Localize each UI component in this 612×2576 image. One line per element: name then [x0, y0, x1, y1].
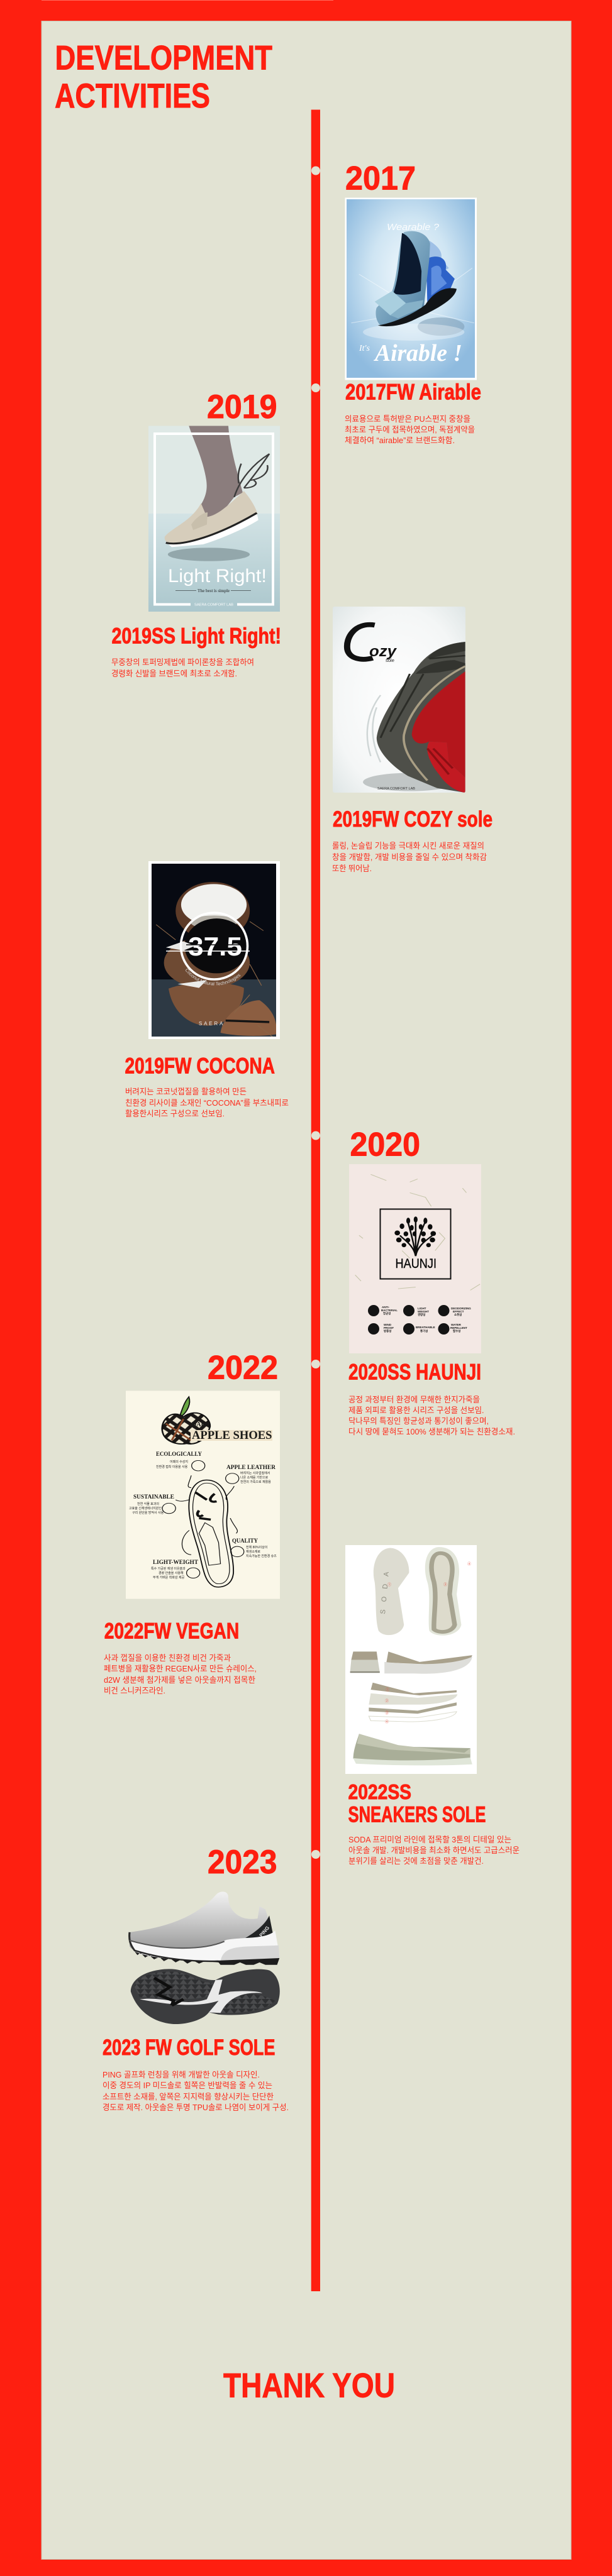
logo circle [181, 913, 248, 979]
outsole spikes [135, 1951, 279, 1965]
description: COCONA: 버려지는 코코넛껍질을 활용하여 만든 [125, 1087, 247, 1096]
insole illustration [162, 1460, 244, 1587]
feature icons: 방풍성 [384, 1329, 391, 1333]
description: COCONA [125, 1087, 289, 1118]
heading: 2019FW COZY sole: 2019FW COZY sole [333, 807, 492, 832]
feature headings: APPLE LEATHER [226, 1465, 275, 1471]
year 2017: 2017 [345, 160, 416, 197]
outsole top view [374, 1548, 409, 1635]
poster text: brand: SAERA COMFORT LAB [377, 787, 415, 791]
feature icons: EFFECT [453, 1310, 464, 1313]
description: HAUNJI: 제품 외피로 활용한 시리즈 구성을 선보임. [348, 1406, 484, 1415]
description: golf sole: 경도로 제작. 아웃솔은 투명 TPU솔로 나염이 보이게 구성. [103, 2103, 289, 2112]
image: golf shoe [130, 1891, 280, 2024]
feature icons: WATER [451, 1323, 462, 1326]
logo text: ozy [369, 643, 398, 660]
sole labels: SODA [379, 1570, 391, 1614]
heading: 2022SS SNEAKERS SOLE [348, 1780, 486, 1827]
logo text [191, 1421, 272, 1442]
year 2023: 2023 [208, 1844, 277, 1881]
description: Airable: 체결하여 “airable”로 브랜드화함. [345, 436, 455, 445]
description: Light Right [111, 658, 254, 678]
feature notes: 어패의 수성지 [170, 1460, 188, 1464]
heel piece [350, 1651, 380, 1673]
feature icons: ANTI- [382, 1306, 389, 1309]
logo text: sole [386, 659, 394, 663]
poster frame [155, 434, 273, 605]
timeline dot 2023 [311, 1850, 320, 1859]
title: DEVELOPMENT [55, 38, 272, 77]
feature notes: 친환경 접착 이용을 사용 [156, 1465, 188, 1469]
feature icons: REPELLENT [450, 1326, 467, 1329]
description: sneakers sole: 분위기를 살리는 것에 초점을 맞춘 개발건. [348, 1856, 484, 1866]
description: Airable [345, 414, 475, 445]
feature headings: QUALITY [232, 1538, 258, 1544]
feature icons: WEIGHT [418, 1310, 429, 1313]
sole line [130, 1932, 218, 1961]
description: Airable: 의료용으로 특허받은 PU스펀지 중창을 [345, 414, 470, 424]
description: COZY sole: 창을 개발함, 개발 비용을 줄일 수 있으며 착화감 [332, 852, 487, 862]
feature notes: 천연의 가죽으로 재활용 [240, 1480, 271, 1484]
shoe upper [130, 1891, 279, 1961]
year 2019: 2019 [207, 388, 277, 426]
heading: 2019SS Light Right!: 2019SS Light Right! [112, 624, 281, 649]
sole labels: ① [386, 1687, 389, 1692]
description: HAUNJI [348, 1395, 515, 1436]
sole labels: ② [443, 1582, 447, 1587]
description: HAUNJI: 다시 땅에 묻혀도 100% 생분해가 되는 친환경소재. [348, 1427, 515, 1436]
feature icons: DEODORIZING [451, 1307, 471, 1310]
poster: COZY sole [333, 607, 465, 793]
description: COZY sole: 롤링, 논슬립 기능을 극대화 시킨 새로운 재질의 [332, 841, 484, 850]
feature headings: SUSTAINABLE [133, 1494, 174, 1500]
apple logo [162, 1397, 210, 1444]
feature notes: 무게 가벼운 착화감 제공 [153, 1575, 185, 1580]
logo text: APPLE SHOES [192, 1429, 272, 1442]
feature notes: 고효율 신재생에너지원인 [129, 1506, 162, 1511]
feature notes: 특수 가공된 재생 이유솔과 [151, 1566, 186, 1571]
description: golf sole [103, 2070, 289, 2112]
year 2022: 2022 [208, 1349, 278, 1387]
outsole inner view [425, 1547, 461, 1636]
description: HAUNJI: 닥나무의 특징인 항균성과 통기성이 좋으며, [348, 1416, 489, 1426]
heel pod [221, 1946, 279, 1961]
logo text: 37.5 [166, 932, 250, 961]
feature notes: 버려지는 사과껍질에서 [240, 1471, 270, 1475]
description: Light Right: 경령화 신발을 브랜드에 최초로 소개함. [111, 669, 237, 678]
description: Airable: 최초로 구두에 접목하였으며, 독점계약을 [345, 425, 475, 434]
title [55, 38, 272, 115]
side view [384, 1651, 472, 1674]
description: HAUNJI: 공정 과정부터 환경에 무해한 한지가죽을 [348, 1395, 480, 1404]
heading: 2022FW VEGAN: 2022FW VEGAN [104, 1619, 239, 1643]
feature icons: 경량성 [418, 1313, 425, 1316]
feature headings: LIGHT-WEIGHT [153, 1560, 199, 1566]
sole labels: ③ [385, 1710, 389, 1715]
description: VEGAN: 사과 껍질을 이용한 친환경 비건 가죽과 [104, 1653, 231, 1663]
logo text: HAUNJI [395, 1256, 437, 1271]
logo text: DAKS [192, 1421, 209, 1428]
logo caption: Coconut Natural Technologies [186, 969, 240, 986]
feature icons: WIND [384, 1323, 392, 1326]
feature icons: BACTERIAL [381, 1309, 398, 1312]
title: ACTIVITIES [55, 76, 210, 115]
outsole bottom view [131, 1969, 280, 2024]
feature notes: 재생소재로 [246, 1549, 260, 1554]
poster text: brand: SAERA COMFORT LAB [194, 603, 233, 607]
poster: Light Right [148, 426, 280, 612]
description: VEGAN: d2W 생분해 첨가제를 넣은 아웃솔까지 접목한 [104, 1675, 255, 1685]
midsole [130, 1930, 279, 1961]
description: Light Right: 무중창의 토퍼밍제법에 파이론창을 조합하여 [111, 658, 254, 667]
description: COCONA: 활용한시리즈 구성으로 선보임. [125, 1109, 225, 1118]
exploded layers [369, 1683, 457, 1722]
logo box [380, 1209, 450, 1279]
description: COZY sole: 또한 뛰어남. [332, 864, 372, 873]
heel panel [242, 1915, 273, 1940]
sole labels: ① [387, 1582, 391, 1587]
poster text: Light Right: Light Right! [168, 566, 267, 586]
feature icons: PROOF [384, 1326, 394, 1329]
feature notes: 지속가능한 친환경 슈즈 [246, 1554, 277, 1558]
feature headings: ECOLOGICALLY [156, 1451, 202, 1458]
poster text: SAERA: SAERA [199, 1021, 225, 1027]
heading: 2019FW COCONA: 2019FW COCONA [125, 1054, 275, 1079]
feature icons: LIGHT [418, 1307, 426, 1310]
timeline line [311, 109, 320, 2291]
sole labels [379, 1561, 471, 1724]
description: VEGAN: 페트병을 재활용한 REGEN사로 만든 슈레이스, [104, 1664, 257, 1673]
sole labels: ② [385, 1698, 389, 1704]
heading: 2020SS HAUNJI: 2020SS HAUNJI [348, 1360, 481, 1384]
description: COCONA: 친환경 리사이클 소재인 “COCONA”를 부츠내피로 [125, 1098, 289, 1108]
heading: 2022SS SNEAKERS SOLE: 2022SS [348, 1780, 411, 1803]
feature notes: 전체 80%이상이 [246, 1545, 267, 1549]
heading: 2017FW Airable: 2017FW Airable [345, 380, 481, 405]
feature notes: 천연 식물 효과의 [137, 1502, 159, 1506]
heading: 2022SS SNEAKERS SOLE: SNEAKERS SOLE [348, 1802, 486, 1827]
description: COZY sole [332, 841, 487, 873]
description: golf sole: PING 골프화 런칭을 위해 개발한 아웃솔 디자인. [103, 2070, 260, 2079]
poster: Airable [345, 197, 477, 380]
logo C mark [347, 625, 375, 659]
poster text: Wearable: Wearable ? [387, 222, 440, 233]
image: sneakers sole [345, 1545, 477, 1774]
poster text: It's Airable: Airable ! [374, 340, 462, 366]
feature notes: 나온 소재를 기반으로 [240, 1475, 269, 1480]
description: sneakers sole [348, 1835, 520, 1866]
poster text: tagline: The best is simple [198, 588, 230, 593]
feature icons: 항균성 [383, 1311, 391, 1315]
description: VEGAN [104, 1653, 257, 1695]
feature icons: 소취성 [454, 1313, 462, 1317]
feature notes: 구리 원단을 방적사 사용 [132, 1511, 164, 1515]
logo tree [394, 1216, 436, 1256]
description: golf sole: 이중 경도의 IP 미드솔로 힐쪽은 반발력을 줄 수 있는 [103, 2081, 272, 2090]
poster text: tagline [175, 588, 251, 593]
heading: 2023 FW GOLF SOLE: 2023 FW GOLF SOLE [103, 2035, 275, 2060]
feature icons: 통기성 [420, 1329, 428, 1333]
sole labels: ④ [467, 1561, 471, 1566]
feature icons [368, 1305, 471, 1335]
timeline dot 2022 [311, 1360, 320, 1368]
feature notes [129, 1460, 277, 1580]
shoe brand text: PING [259, 1925, 270, 1938]
poster: HAUNJI [349, 1164, 481, 1353]
poster: COCONA [148, 861, 280, 1039]
year 2020: 2020 [350, 1126, 420, 1163]
description: sneakers sole: SODA 프리미엄 라인에 접목할 3톤의 디테일 있는 [348, 1835, 511, 1844]
logo text: 37.5: 37.5 [188, 932, 242, 961]
description: golf sole: 소프트한 소재를, 앞쪽은 지지력을 향상시키는 단단한 [103, 2092, 274, 2101]
feature notes: 경량 안솔을 사용해 [159, 1571, 184, 1575]
description: sneakers sole: 아웃솔 개발. 개발비용을 최소화 하면서도 고급스러운 [348, 1846, 520, 1855]
description: VEGAN: 비건 스니커즈라인. [104, 1686, 165, 1695]
sole labels: ④ [385, 1719, 389, 1724]
poster text: It's Airable: It's [359, 344, 370, 353]
feature icons: BREATHABLE [416, 1326, 435, 1329]
full sole side [353, 1734, 472, 1765]
timeline dot 2020 [311, 1131, 320, 1140]
feature headings [133, 1451, 275, 1566]
poster: VEGAN apple shoes [126, 1390, 280, 1599]
timeline dot 2017 [311, 166, 320, 175]
closing: thank you: THANK YOU [223, 2366, 395, 2405]
feature icons: 발수성 [453, 1329, 460, 1333]
timeline dot 2019 [311, 383, 320, 392]
